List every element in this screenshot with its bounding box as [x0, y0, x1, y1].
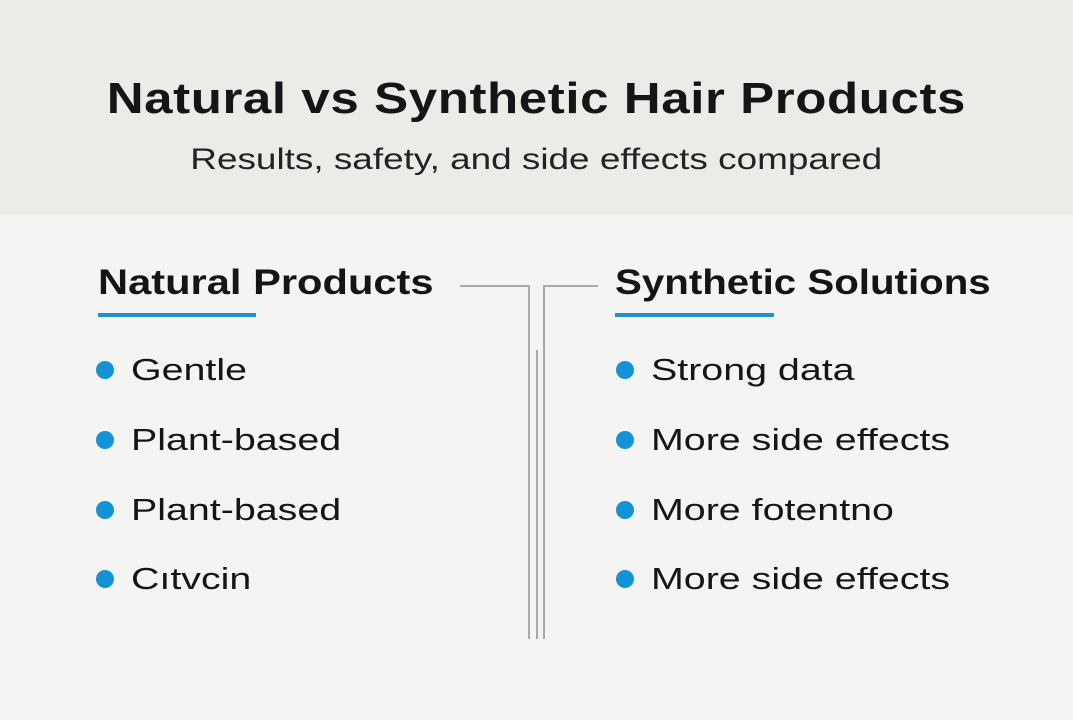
- bullet list synthetic: More side effects: [651, 561, 950, 596]
- underline natural: [98, 313, 256, 317]
- bullet list synthetic: [616, 352, 950, 596]
- subtitle: Results, safety, and side effects compared: [191, 143, 882, 176]
- bullet list natural: Gentle: [131, 352, 247, 387]
- bullet list synthetic: Strong data: [651, 352, 855, 387]
- bullet list natural: Plant-based: [131, 492, 341, 527]
- title: Natural vs Synthetic Hair Products: [107, 74, 966, 123]
- heading synthetic: Synthetic Solutions: [615, 263, 991, 302]
- heading natural: Natural Products: [98, 263, 434, 302]
- bullet list natural: Cıtvcin: [131, 561, 251, 596]
- bullet list natural: Plant-based: [131, 422, 341, 457]
- bullet list synthetic: More side effects: [651, 422, 950, 457]
- header band: [0, 0, 1073, 215]
- panel: natural: [96, 263, 434, 596]
- panel: synthetic: [615, 263, 991, 596]
- bullet list natural: [96, 352, 341, 596]
- bullet list synthetic: More fotentno: [651, 492, 894, 527]
- underline synthetic: [615, 313, 774, 317]
